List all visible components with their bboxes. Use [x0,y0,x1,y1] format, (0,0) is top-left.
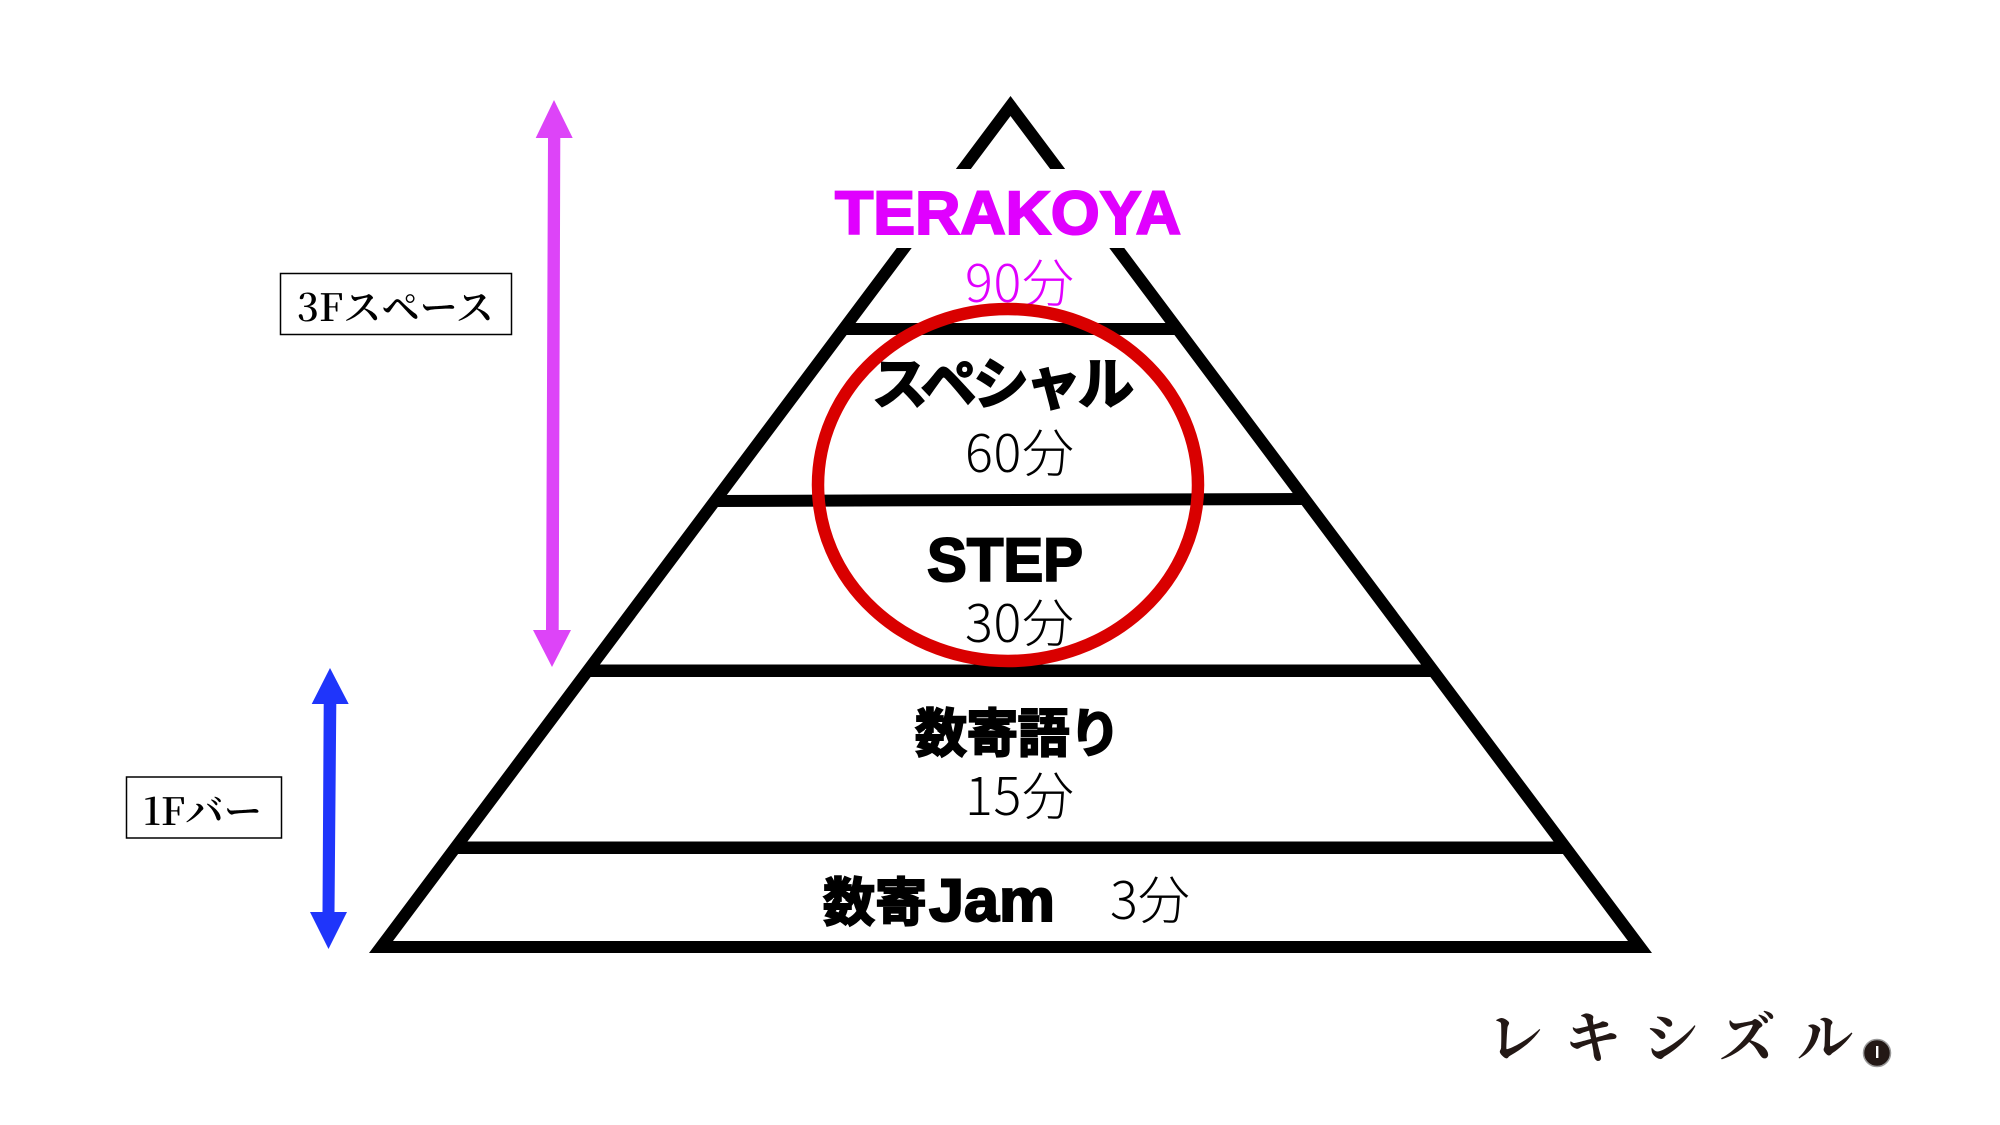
tier: 数寄Jam: 数寄 [823,875,927,933]
tier: スペシャル [872,353,1134,487]
logo: レキシズル: レキシズル [1487,995,1853,1075]
tier: 数寄Jam [823,859,1190,934]
red highlight ellipse [818,309,1198,661]
tier: TERAKOYA: 90分 [965,242,1074,317]
tier: 数寄語り [915,706,1121,830]
arrow: 1F span [310,668,349,949]
tier: 数寄Jam: Jam [929,867,1055,934]
tier: STEP [927,526,1083,657]
label: 1Fバー: 1Fバー [143,781,262,836]
white backing behind TERAKOYA [830,169,1190,248]
tier: 数寄語り: 15分 [965,755,1074,830]
tier: 数寄Jam: 3分 [1110,859,1190,934]
logo mark [1864,1040,1890,1066]
pyramid outline [381,106,1640,947]
tier: スペシャル: 60分 [965,412,1074,487]
tier: スペシャル: スペシャル [872,353,1134,416]
tier: TERAKOYA [835,179,1181,317]
label: 3Fスペース: 3Fスペース [297,277,494,332]
tier: STEP: 30分 [965,582,1074,657]
tier: TERAKOYA: TERAKOYA [835,179,1181,247]
arrow: 3F span [533,100,573,667]
tier: 数寄語り: 数寄語り [915,706,1121,764]
label: 1Fバー [126,777,282,838]
tier: STEP: STEP [927,526,1083,594]
